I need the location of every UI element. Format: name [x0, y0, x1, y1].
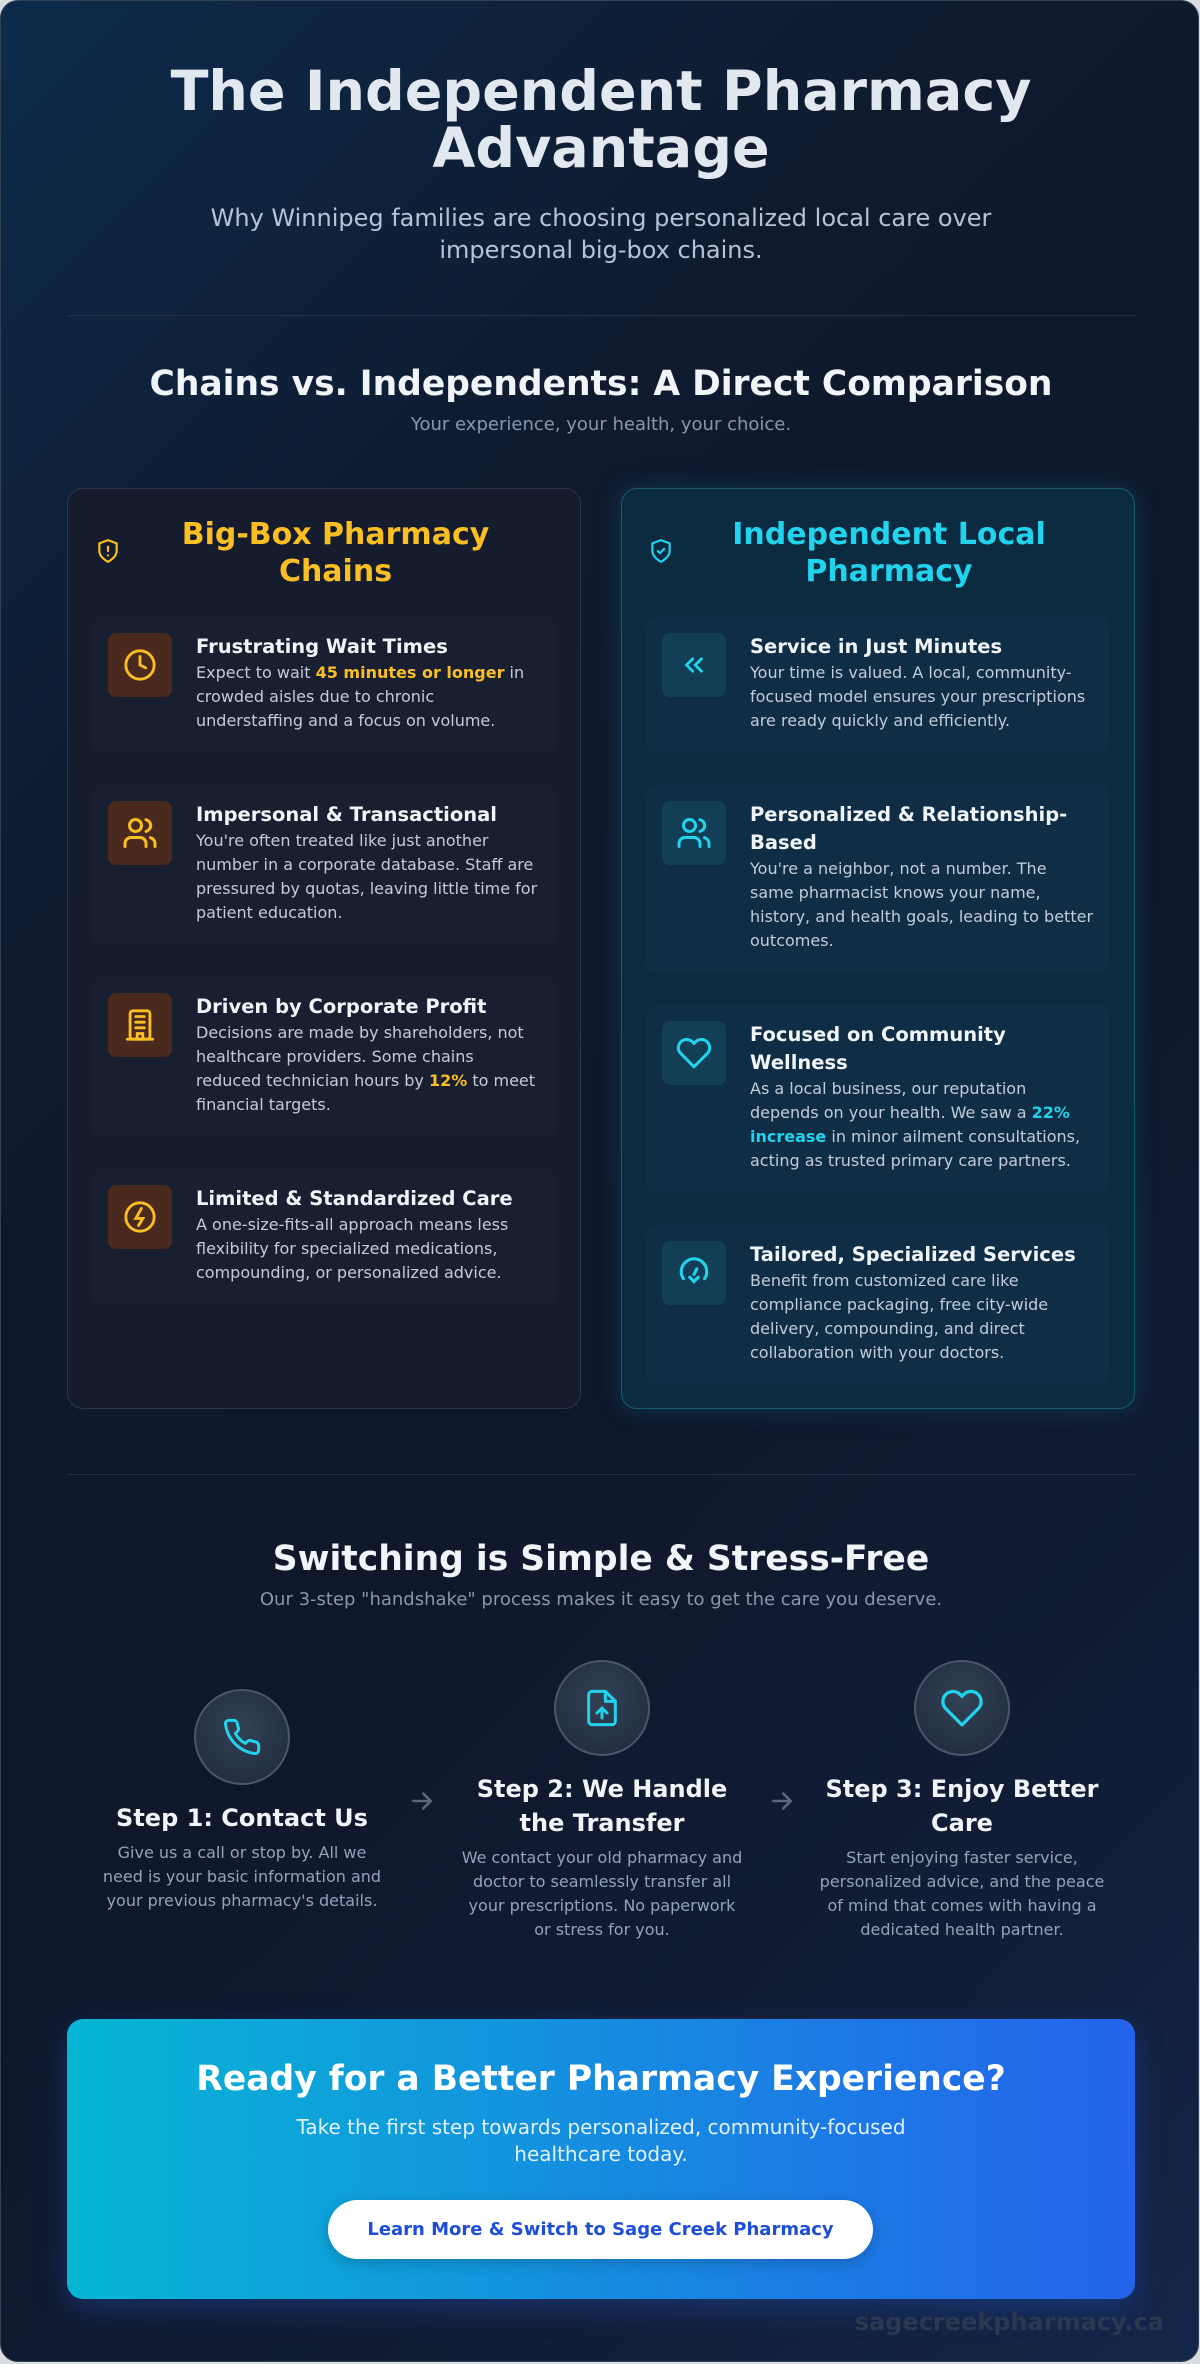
icon: users — [662, 801, 726, 865]
step 3: Care — [931, 1809, 993, 1837]
subtitle: Why Winnipeg families are choosing personalized local care over — [211, 204, 991, 232]
icon: phone — [194, 1689, 290, 1785]
card: impersonal — [92, 785, 556, 945]
arrow 1 — [412, 1792, 432, 1810]
footer url: sagecreekpharmacy.ca — [855, 2308, 1164, 2336]
CTA banner: Ready for a Better Pharmacy Experience? — [196, 2059, 1006, 2099]
icon: heart — [662, 1021, 726, 1085]
card: limited care: A one-size-fits-all approach means less flexibility for specialized medications, compounding, or personalized advice. — [196, 1215, 508, 1282]
card: limited care: Limited & Standardized Care — [196, 1187, 513, 1210]
steps row — [103, 1660, 1104, 1939]
icon: shield check — [651, 539, 671, 563]
icon: file upload — [554, 1660, 650, 1756]
button — [328, 2200, 873, 2259]
card: wait times — [92, 617, 556, 753]
button: Learn More & Switch to Sage Creek Pharmacy — [367, 2219, 834, 2240]
heading: switching: Switching is Simple & Stress-Free — [273, 1539, 929, 1579]
icon: clock — [108, 633, 172, 697]
panel: big-box chains — [67, 488, 581, 1409]
icon: users — [108, 801, 172, 865]
step 2: Step 2: We Handle — [477, 1775, 727, 1803]
CTA banner — [67, 2019, 1135, 2299]
step 2 — [462, 1660, 742, 1939]
icon: building — [108, 993, 172, 1057]
title: Advantage — [432, 116, 770, 181]
icon: badge check — [662, 1241, 726, 1305]
step 2: We contact your old pharmacy and doctor to seamlessly transfer all your prescriptions. No paperwork or stress for you. — [462, 1848, 742, 1939]
icon: shield alert — [98, 539, 118, 563]
card: wait times: Frustrating Wait Times — [196, 635, 448, 658]
subtitle: impersonal big-box chains. — [439, 236, 763, 264]
icon: no-zap — [108, 1185, 172, 1249]
card: personalized: Personalized & Relationship-Based — [750, 803, 1067, 854]
step 1 — [103, 1689, 381, 1910]
icon: chevrons — [662, 633, 726, 697]
card: personalized: You're a neighbor, not a number. The same pharmacist knows your name, history, and health goals, leading to better outcomes. — [750, 859, 1093, 950]
card: service minutes: Your time is valued. A local, community-focused model ensures your prescriptions are ready quickly and efficiently. — [750, 663, 1085, 730]
card: corporate profit — [92, 977, 556, 1137]
subheading: switching: Our 3-step "handshake" process makes it easy to get the care you deserve. — [260, 1589, 942, 1610]
step 3: Step 3: Enjoy Better — [825, 1775, 1099, 1803]
card: service minutes: Service in Just Minutes — [750, 635, 1002, 658]
subtitle — [211, 204, 992, 264]
step 3 — [820, 1660, 1104, 1939]
panel heading: big-box: Big-Box Pharmacy — [182, 517, 489, 552]
panel heading: big-box — [98, 517, 489, 589]
card: community wellness: As a local business, our reputation depends on your health. We saw a 22% increase in minor ailment consultations, acting as trusted primary care partners. — [750, 1079, 1080, 1170]
card: impersonal: Impersonal & Transactional — [196, 803, 497, 826]
card: specialized services: Tailored, Specialized Services — [750, 1243, 1076, 1266]
icon: heart — [914, 1660, 1010, 1756]
card: specialized services: Benefit from customized care like compliance packaging, free city-wide delivery, compounding, and direct collaboration with your doctors. — [750, 1271, 1048, 1362]
card: community wellness — [646, 1005, 1110, 1193]
title — [170, 59, 1031, 181]
card: personalized — [646, 785, 1110, 973]
card: impersonal: You're often treated like just another number in a corporate database. Staff are pressured by quotas, leaving little time for patient education. — [196, 831, 537, 922]
card: community wellness: Focused on Community Wellness — [750, 1023, 1006, 1074]
heading: comparison: Chains vs. Independents: A Direct Comparison — [150, 364, 1052, 404]
card: corporate profit: Decisions are made by shareholders, not healthcare providers. Some chains reduced technician hours by 12% to meet financial targets. — [196, 1023, 535, 1114]
panel: independent pharmacy — [621, 488, 1135, 1409]
step 1: Give us a call or stop by. All we need is your basic information and your previous pharmacy's details. — [103, 1843, 381, 1910]
CTA banner: Take the first step towards personalized, community-focused healthcare today. — [296, 2115, 906, 2166]
card: wait times: Expect to wait 45 minutes or longer in crowded aisles due to chronic understaffing and a focus on volume. — [196, 663, 524, 730]
step 1: Step 1: Contact Us — [116, 1804, 368, 1832]
card: limited care — [92, 1169, 556, 1305]
title: The Independent Pharmacy — [171, 59, 1031, 124]
panel heading: independent: Independent Local — [732, 517, 1046, 552]
card: specialized services — [646, 1225, 1110, 1385]
panel heading: independent: Pharmacy — [805, 554, 973, 589]
step 3: Start enjoying faster service, personalized advice, and the peace of mind that comes with having a dedicated health partner. — [820, 1848, 1104, 1939]
panel heading: big-box: Chains — [279, 554, 392, 589]
subheading: comparison: Your experience, your health, your choice. — [411, 414, 791, 435]
arrow 2 — [772, 1792, 792, 1810]
step 2: the Transfer — [520, 1809, 684, 1837]
panel heading: independent — [651, 517, 1046, 589]
card: service minutes — [646, 617, 1110, 753]
card: corporate profit: Driven by Corporate Profit — [196, 995, 486, 1018]
